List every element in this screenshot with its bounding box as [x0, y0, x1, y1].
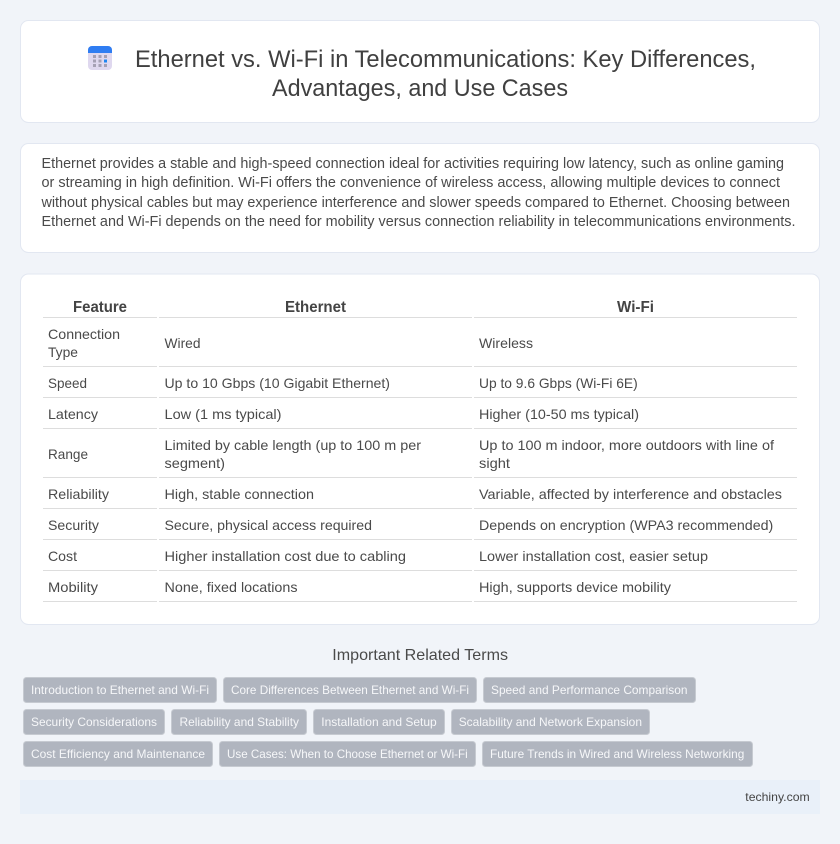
chip — [314, 710, 444, 734]
table row: range: Limited by cable length (up to 100 m per — [164, 437, 421, 453]
table row: range — [48, 437, 774, 471]
chip: Reliability and Stability — [180, 715, 299, 729]
chip: Installation and Setup — [321, 715, 437, 729]
text block: summary paragraph: Ethernet provides a stable and high-speed connection ideal for activities requiring low latency, such as online gaming — [42, 156, 784, 172]
table row: reliability: Variable, affected by interference and obstacles — [479, 486, 782, 502]
chip — [24, 678, 216, 702]
table row: cost — [48, 548, 708, 564]
table row: connection type: Type — [48, 344, 78, 360]
table row: connection type: Connection — [48, 326, 120, 342]
table row: mobility: None, fixed locations — [164, 579, 298, 595]
table row: latency: Higher (10-50 ms typical) — [479, 406, 639, 422]
chip: Use Cases: When to Choose Ethernet or Wi-Fi — [227, 747, 468, 761]
table row: reliability: Reliability — [48, 486, 109, 502]
chip — [484, 678, 696, 702]
table row: security: Secure, physical access required — [164, 517, 372, 533]
table row: latency — [48, 406, 639, 422]
table row: reliability — [48, 486, 782, 502]
table row: speed — [48, 375, 638, 391]
table row: range: Up to 100 m indoor, more outdoors with line of — [479, 437, 774, 453]
chip — [224, 678, 476, 702]
chip — [24, 742, 212, 766]
table row: speed: Speed — [48, 375, 87, 391]
chip: Security Considerations — [31, 715, 157, 729]
chip: Future Trends in Wired and Wireless Networking — [490, 747, 744, 761]
table row: cost: Cost — [48, 548, 77, 564]
text block: summary paragraph: Ethernet and Wi-Fi depends on the need for mobility versus connection reliability in telecommunications environments. — [42, 214, 795, 230]
table header row: Ethernet — [285, 299, 347, 316]
table row: cost: Lower installation cost, easier setup — [479, 548, 708, 564]
chip: Speed and Performance Comparison — [491, 683, 688, 697]
table row: mobility: High, supports device mobility — [479, 579, 671, 595]
title: Ethernet vs. Wi-Fi in Telecommunications: Key Differences, — [135, 46, 756, 73]
footer — [20, 780, 820, 814]
table row: security: Depends on encryption (WPA3 recommended) — [479, 517, 773, 533]
table row: reliability: High, stable connection — [164, 486, 314, 502]
heading: important related terms: Important Related Terms — [332, 647, 508, 664]
table header row — [73, 299, 654, 316]
table row: speed: Up to 9.6 Gbps (Wi-Fi 6E) — [479, 375, 638, 391]
icon: calendar — [88, 46, 112, 70]
table header row: Feature — [73, 299, 127, 316]
panel: description — [20, 144, 820, 252]
table row: mobility — [48, 579, 671, 595]
chip: Introduction to Ethernet and Wi-Fi — [31, 683, 209, 697]
table row: security: Security — [48, 517, 99, 533]
chip — [452, 710, 650, 734]
text block: summary paragraph: without physical cables but may experience interference and slower speeds compared to Ethernet. Choosing between — [41, 195, 790, 211]
table row: connection type — [48, 326, 533, 360]
chip — [172, 710, 306, 734]
title: Advantages, and Use Cases — [272, 75, 568, 102]
chip — [482, 742, 752, 766]
text block: summary paragraph: or streaming in high definition. Wi-Fi offers the convenience of wireless access, allowing multiple devices to connect — [42, 175, 780, 191]
text block: summary paragraph — [41, 156, 795, 230]
chip — [24, 710, 164, 734]
table row: connection type: Wireless — [479, 335, 533, 351]
table row: range: Range — [48, 446, 88, 462]
table row: range: segment) — [164, 455, 225, 471]
chip: Cost Efficiency and Maintenance — [31, 747, 205, 761]
table row: mobility: Mobility — [48, 579, 98, 595]
panel: comparison table — [20, 274, 820, 624]
table header row: Wi-Fi — [617, 299, 654, 316]
chip — [220, 742, 476, 766]
tag chips — [24, 678, 752, 766]
table row: range: sight — [479, 455, 510, 471]
chip: Core Differences Between Ethernet and Wi-Fi — [231, 683, 469, 697]
table row: speed: Up to 10 Gbps (10 Gigabit Ethernet) — [164, 375, 390, 391]
footer: techiny.com — [745, 790, 810, 804]
table row: latency: Low (1 ms typical) — [164, 406, 282, 422]
table row: latency: Latency — [48, 406, 98, 422]
table row: cost: Higher installation cost due to cabling — [164, 548, 406, 564]
chip: Scalability and Network Expansion — [459, 715, 642, 729]
table row: security — [48, 517, 773, 533]
panel: title header — [20, 20, 820, 122]
title — [135, 46, 756, 102]
table row: connection type: Wired — [164, 335, 200, 351]
